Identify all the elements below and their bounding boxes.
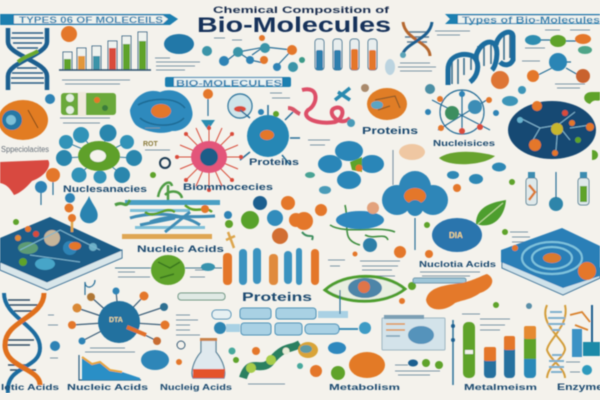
label: nuclesanacies: Nuclesanacies bbox=[63, 184, 147, 194]
orange ball bottom left bbox=[64, 204, 74, 212]
icon: orange ball right bbox=[491, 71, 509, 89]
icon: large DNA ribbon bbox=[448, 31, 513, 85]
bottom labels: Nucleig Acids bbox=[160, 382, 232, 392]
icon: blue ball right bbox=[502, 86, 526, 106]
text lines and small molecules bbox=[299, 52, 436, 75]
orange half balls bbox=[295, 212, 313, 240]
network circle bbox=[425, 90, 499, 134]
molecule network top bbox=[202, 35, 298, 72]
bottom labels: Nucleic Acids bbox=[67, 382, 148, 392]
pale label pill bbox=[413, 278, 466, 283]
label: proteins large: Proteins bbox=[242, 290, 312, 304]
small orange pattern blob bbox=[399, 144, 425, 160]
flask bbox=[192, 338, 225, 378]
green chain bbox=[228, 344, 300, 384]
chart: area chart bbox=[79, 348, 141, 380]
info pill rows bbox=[212, 308, 371, 335]
icon: pins above platform bbox=[13, 214, 85, 295]
green textured ball bbox=[115, 255, 222, 285]
title bbox=[197, 5, 391, 37]
icon: small blue ball bbox=[45, 94, 55, 104]
dark molecular disc bbox=[508, 101, 596, 159]
test tubes top centre bbox=[315, 39, 377, 70]
DNA blue oval bbox=[432, 218, 530, 252]
pale cell circle bbox=[228, 94, 252, 118]
vertical connector with beads bbox=[451, 302, 532, 385]
icon: orange ball bbox=[61, 26, 77, 42]
blue spiky cell bbox=[240, 105, 300, 165]
data panel bbox=[382, 315, 445, 350]
text lines and pills lower bbox=[395, 359, 443, 375]
molecules top right bbox=[522, 30, 592, 88]
central vertical connector bbox=[415, 218, 433, 258]
icon: orange textured cell bbox=[361, 84, 435, 120]
icon: pink squiggle protein bbox=[302, 88, 355, 127]
DNA orange blue bottom left bbox=[4, 293, 60, 393]
enzyme device icons bbox=[566, 305, 600, 375]
bottom labels: letic Acids bbox=[1, 382, 59, 392]
liver bbox=[0, 160, 49, 195]
green cell panel bbox=[60, 92, 116, 123]
banner: types of bio-molecules bbox=[445, 14, 600, 26]
central flow diagram bbox=[115, 200, 220, 239]
icon: DNA helix top left bbox=[8, 28, 47, 90]
orange oval bbox=[349, 352, 385, 378]
banner: types of molecules: TYPES 06 OF MOLECEILS bbox=[19, 15, 163, 26]
text lines bbox=[360, 261, 480, 276]
label: nucleic acids centre: Nucleic Acids bbox=[137, 244, 224, 254]
blue flower protein bbox=[130, 90, 193, 133]
pale badge bbox=[178, 293, 225, 300]
bottles right bbox=[526, 172, 589, 211]
green leaf shape bbox=[439, 152, 495, 164]
small text: specioacites: Sppeciolacites bbox=[1, 145, 49, 154]
pink virus bbox=[175, 125, 243, 192]
green donut with satellites bbox=[56, 124, 142, 184]
label: nucleotide acids: Nuclotia Acids bbox=[419, 259, 496, 269]
text lines lower centre bbox=[85, 268, 212, 365]
orange pin and blue heart bbox=[201, 89, 300, 130]
bottom labels bbox=[1, 382, 600, 392]
icon: blue ellipse bbox=[164, 34, 194, 54]
icon: green plant bbox=[584, 92, 600, 160]
banner: types of bio-molecules: Types of Bio-Molecules bbox=[462, 15, 600, 26]
ball cluster lower middle bbox=[297, 342, 372, 380]
green branch bbox=[158, 183, 182, 200]
blue DNA cell bbox=[68, 288, 170, 345]
bottom labels: Metalmeism bbox=[464, 382, 538, 392]
blue elongated vine molecule bbox=[315, 202, 406, 258]
DNA blue oval: DIA bbox=[449, 231, 463, 240]
chart: test tube bars bbox=[59, 32, 200, 84]
blue DNA cell: DTA bbox=[109, 317, 123, 324]
small icons centre bbox=[143, 128, 170, 178]
chart: bars bottom right bbox=[463, 322, 536, 378]
bottom labels: Metabolism bbox=[329, 382, 401, 392]
title: Bio-Molecules bbox=[197, 14, 391, 37]
blue ball lower bbox=[141, 350, 169, 370]
liver side balls bbox=[35, 168, 75, 205]
blue clover bbox=[305, 140, 393, 194]
DNA vertical capsule bbox=[545, 305, 566, 378]
isometric platform right bbox=[501, 228, 600, 295]
label: biommocecies: Biommocecies bbox=[183, 182, 273, 193]
blue balls cluster centre right bbox=[447, 162, 515, 192]
icon: green leaf bbox=[476, 200, 506, 225]
banner: types of molecules bbox=[0, 14, 178, 26]
title: Chemical Composition of bbox=[213, 5, 390, 16]
label: proteins right: Proteins bbox=[362, 126, 419, 137]
ball cluster centre bbox=[201, 196, 303, 248]
orange donut bbox=[0, 100, 48, 140]
icon: small DNA orange blue bbox=[402, 22, 470, 56]
banner: bio-molecules bbox=[165, 77, 291, 88]
teardrop bbox=[80, 196, 98, 223]
label: nucleiscices: Nucleisices bbox=[433, 138, 495, 148]
big blue four ball cluster bbox=[382, 171, 448, 216]
pill row bbox=[223, 248, 345, 285]
banner: bio-molecules: BIO-MOLECULES bbox=[176, 78, 282, 88]
green eye diagram bbox=[325, 276, 416, 314]
orange blob bbox=[426, 274, 492, 309]
small icons centre: ROT bbox=[143, 141, 158, 148]
isometric circuit platform bbox=[0, 217, 122, 290]
label: proteins: Proteins bbox=[249, 157, 299, 168]
bottom labels: Enzyme bbox=[557, 382, 600, 392]
